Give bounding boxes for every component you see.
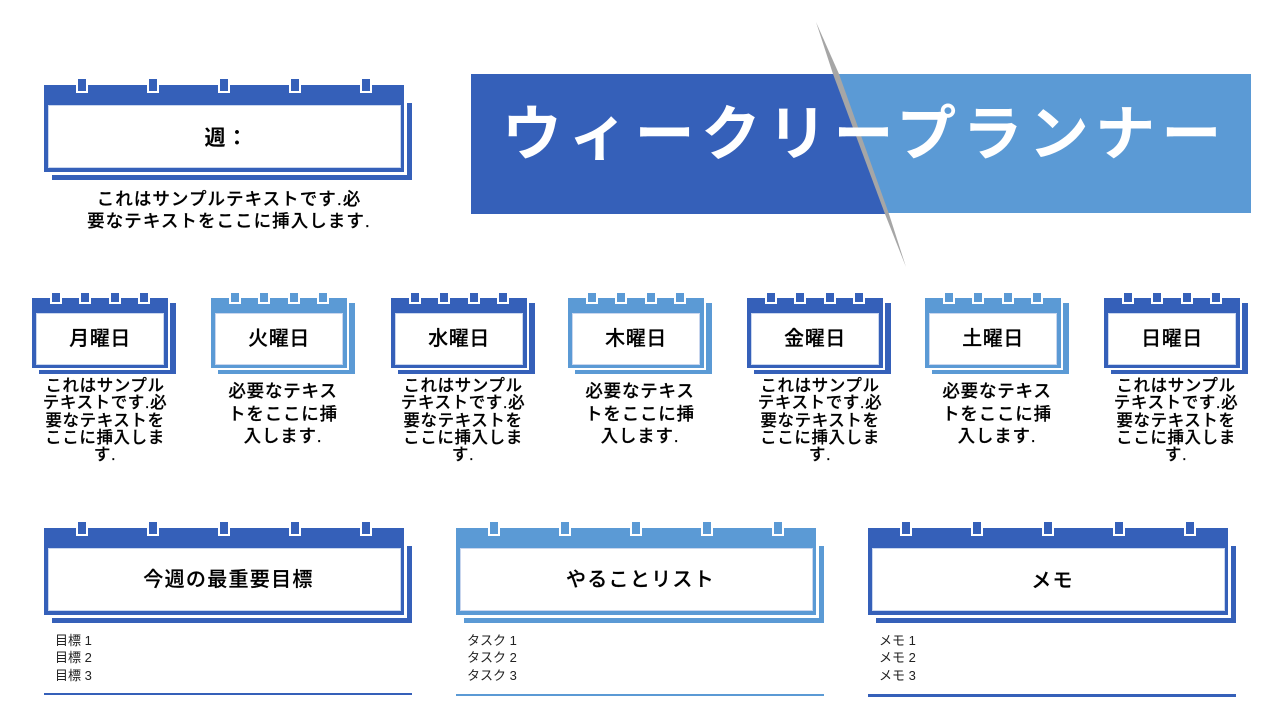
text: Wednesday: これはサンプルテキストです.必要なテキストをここに挿入します. bbox=[401, 377, 525, 464]
panel: memo: メモ bbox=[1031, 570, 1074, 592]
heading: week: 週： bbox=[204, 127, 248, 150]
text: Monday: これはサンプルテキストです.必要なテキストをここに挿入します. bbox=[43, 377, 167, 464]
panel: to-do list bbox=[456, 522, 824, 623]
list: memos bbox=[879, 633, 916, 683]
list: tasks: タスク 1 bbox=[467, 633, 517, 648]
text: Sunday: これはサンプルテキストです.必要なテキストをここに挿入します. bbox=[1114, 377, 1238, 464]
panel: Thursday bbox=[568, 293, 712, 374]
panel: Tuesday: 火曜日 bbox=[248, 328, 310, 350]
text: week description bbox=[87, 189, 371, 231]
panel: Wednesday bbox=[391, 293, 535, 374]
title: ウィークリープランナー bbox=[502, 101, 1228, 168]
text: week description: 要なテキストをここに挿入します. bbox=[87, 211, 371, 231]
list: tasks: タスク 3 bbox=[467, 668, 517, 683]
panel: memo bbox=[868, 522, 1236, 623]
list: memos: メモ 1 bbox=[879, 633, 916, 648]
text: Saturday: 必要なテキストをここに挿入します. bbox=[942, 381, 1052, 446]
panel: Saturday: 土曜日 bbox=[962, 328, 1024, 350]
text: Thursday: 必要なテキストをここに挿入します. bbox=[585, 381, 695, 446]
list: goals: 目標 2 bbox=[55, 650, 92, 665]
panel: Monday bbox=[32, 293, 176, 374]
divider: memos bbox=[868, 694, 1236, 697]
panel: Thursday: 木曜日 bbox=[605, 328, 667, 350]
text: week description: これはサンプルテキストです.必 bbox=[97, 189, 361, 209]
panel: top goals bbox=[44, 522, 412, 623]
panel: to-do list: やることリスト bbox=[566, 569, 715, 591]
panel: Saturday bbox=[925, 293, 1069, 374]
list: memos: メモ 2 bbox=[879, 650, 916, 665]
list: tasks: タスク 2 bbox=[467, 650, 517, 665]
list: goals: 目標 3 bbox=[55, 668, 92, 683]
list: memos: メモ 3 bbox=[879, 668, 916, 683]
divider: tasks bbox=[456, 694, 824, 696]
title banner bbox=[471, 22, 1251, 266]
panel: week bbox=[44, 79, 412, 180]
panel: Sunday: 日曜日 bbox=[1141, 328, 1203, 350]
panel: Friday bbox=[747, 293, 891, 374]
divider: goals bbox=[44, 693, 412, 695]
panel: top goals: 今週の最重要目標 bbox=[143, 569, 314, 591]
list: tasks bbox=[467, 633, 517, 683]
panel: Sunday bbox=[1104, 293, 1248, 374]
panel: Friday: 金曜日 bbox=[784, 328, 846, 350]
text: Friday: これはサンプルテキストです.必要なテキストをここに挿入します. bbox=[758, 377, 882, 464]
panel: Tuesday bbox=[211, 293, 355, 374]
list: goals: 目標 1 bbox=[55, 633, 92, 648]
panel: Wednesday: 水曜日 bbox=[428, 328, 490, 350]
panel: Monday: 月曜日 bbox=[69, 328, 131, 350]
list: goals bbox=[55, 633, 92, 683]
text: Tuesday: 必要なテキストをここに挿入します. bbox=[228, 381, 338, 446]
